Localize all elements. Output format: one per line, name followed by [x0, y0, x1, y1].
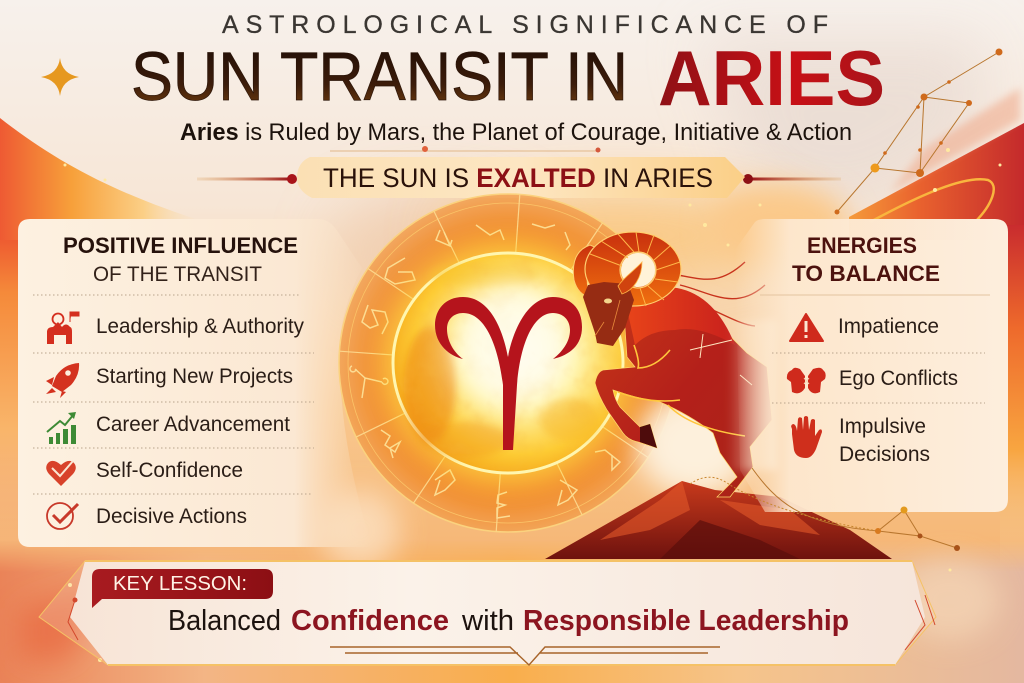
row: impulsive decisions: [791, 414, 930, 466]
ram body: [595, 280, 772, 497]
row: career advancement: [47, 412, 290, 444]
panel: energies to balance: TO BALANCE: [792, 261, 940, 286]
title line two: SUN TRANSIT IN: [131, 38, 628, 115]
ram highlights: [618, 345, 745, 436]
panel: energies to balance: [735, 219, 1008, 512]
constellation top right: [834, 48, 1002, 214]
heading: energies to balance: ENERGIES: [807, 233, 917, 258]
star icon: [41, 58, 79, 96]
row: impulsive decisions: Impulsive: [839, 414, 926, 438]
key lesson statement: Confidence: [291, 605, 449, 637]
banner text: THE SUN IS EXALTED IN ARIES: [323, 163, 713, 193]
title word aries: ARIES: [658, 34, 885, 122]
row: new projects: [46, 363, 293, 398]
ram mane strands: [678, 262, 765, 326]
sun: [384, 243, 632, 483]
row: self-confidence: [46, 458, 243, 486]
key lesson statement: with: [461, 605, 514, 637]
title: [131, 11, 885, 122]
ram mane: [625, 285, 735, 345]
zodiac wheel: [339, 194, 677, 532]
key lesson statement: [168, 605, 849, 637]
subheading: OF THE TRANSIT: [93, 263, 262, 286]
row: impatience: [790, 314, 939, 341]
key lesson tag: KEY LESSON:: [113, 572, 247, 595]
ram head: [583, 282, 634, 346]
row: impatience: Impatience: [838, 314, 939, 338]
panel: positive influence: [18, 219, 372, 547]
ram ear: [618, 262, 642, 294]
ram back horn: [573, 245, 597, 297]
ram hoof: [640, 424, 657, 448]
row: ego conflicts: [787, 366, 958, 393]
sparkles: [64, 148, 1002, 662]
pale glow behind ram: [637, 393, 753, 497]
key lesson statement: Responsible Leadership: [523, 605, 849, 637]
subtitle: Aries is Ruled by Mars, the Planet of Courage, Initiative & Action: [180, 119, 852, 146]
row: decisive actions: Decisive Actions: [96, 504, 247, 528]
row: new projects: Starting New Projects: [96, 364, 293, 388]
mountain: [545, 481, 892, 559]
ram: [573, 232, 778, 497]
key lesson statement: Balanced: [168, 605, 281, 637]
key lesson tag: [92, 569, 273, 608]
row: self-confidence: Self-Confidence: [96, 458, 243, 482]
row: leadership: Leadership & Authority: [96, 314, 304, 338]
ram rear fade: [728, 320, 778, 470]
heading: positive influence: POSITIVE INFLUENCE: [63, 233, 298, 258]
aries glyph: [435, 297, 582, 450]
row: decisive actions: [47, 503, 247, 529]
ram eye: [604, 298, 612, 304]
panel: key lesson: [39, 561, 936, 665]
row: impulsive decisions: Decisions: [839, 442, 930, 466]
row: leadership: [47, 312, 304, 344]
row: ego conflicts: Ego Conflicts: [839, 366, 958, 390]
banner: the sun is exalted: [197, 146, 841, 198]
title line one: ASTROLOGICAL SIGNIFICANCE OF: [222, 11, 828, 39]
constellation lower right: [690, 468, 960, 551]
row: career advancement: Career Advancement: [96, 412, 290, 436]
ram main horn: [585, 232, 681, 306]
